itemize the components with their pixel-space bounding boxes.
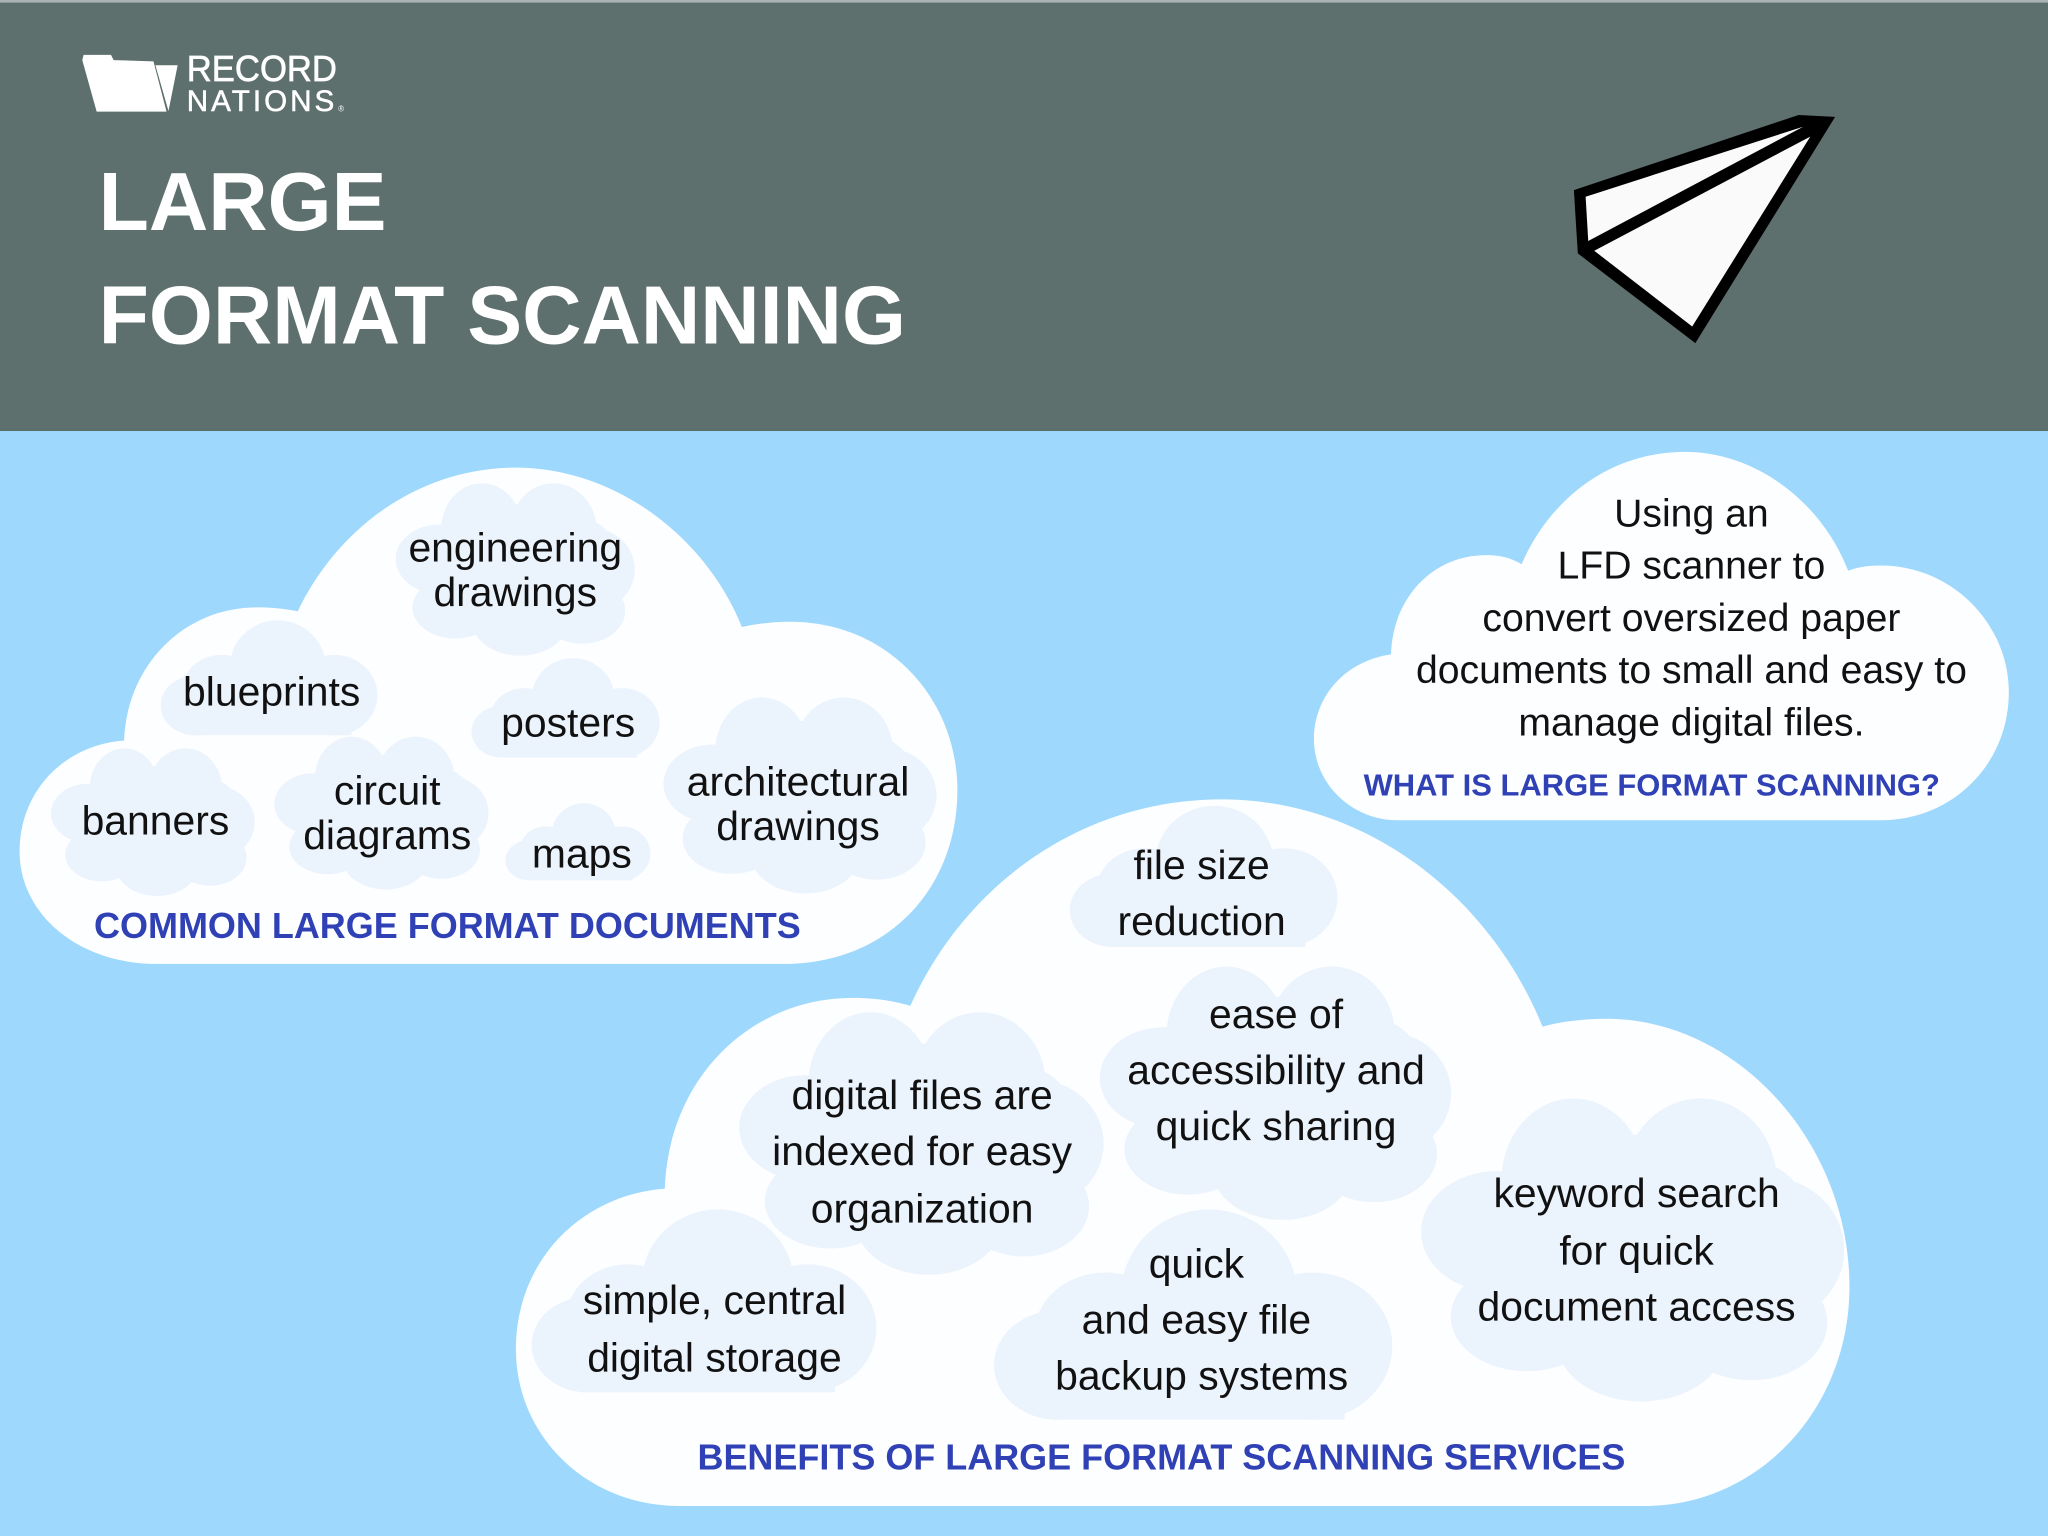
definition text: Using an <box>1614 492 1769 535</box>
heading: benefits: BENEFITS OF LARGE FORMAT SCANNING SERVICES <box>697 1436 1625 1477</box>
item: posters <box>472 658 660 758</box>
item: file size reduction: file size <box>1133 842 1270 888</box>
item: circuit diagrams <box>274 737 488 889</box>
heading: common large format documents: COMMON LARGE FORMAT DOCUMENTS <box>94 905 801 946</box>
cloud shape <box>1314 452 2009 820</box>
icon: paper plane <box>1574 115 1835 343</box>
item: architectural drawings <box>664 697 936 893</box>
logo wordmark: RECORD <box>187 48 337 89</box>
item: architectural drawings: architectural <box>687 758 909 804</box>
item: circuit diagrams: diagrams <box>303 812 471 858</box>
item: simple central storage: simple, central <box>583 1277 846 1323</box>
panel: common large format documents <box>20 468 957 964</box>
item: circuit diagrams: circuit <box>334 768 441 814</box>
item: posters: posters <box>501 700 635 746</box>
item: quick file backup: backup systems <box>1055 1353 1348 1399</box>
item: simple central storage: digital storage <box>587 1334 842 1380</box>
item: digital files indexed <box>739 1012 1104 1275</box>
item: quick file backup: and easy file <box>1082 1297 1311 1343</box>
item: digital files indexed: digital files are <box>791 1072 1053 1118</box>
item: engineering drawings: drawings <box>433 569 597 615</box>
panel: what is large format scanning <box>1314 452 2009 820</box>
header band <box>0 0 2048 431</box>
logo wordmark: ® <box>338 105 344 114</box>
definition text: convert oversized paper <box>1482 597 1900 640</box>
item: engineering drawings: engineering <box>408 525 622 571</box>
item: blueprints: blueprints <box>183 668 360 714</box>
title: FORMAT SCANNING <box>99 271 906 362</box>
item: file size reduction <box>1070 806 1337 947</box>
item: ease of accessibility <box>1100 967 1451 1220</box>
item: quick file backup: quick <box>1149 1240 1245 1286</box>
definition text: documents to small and easy to <box>1416 649 1967 692</box>
item: quick file backup <box>994 1209 1392 1420</box>
item: maps: maps <box>532 830 632 876</box>
definition text: LFD scanner to <box>1558 545 1825 588</box>
item: keyword search: for quick <box>1559 1227 1714 1273</box>
item: engineering drawings <box>396 483 635 656</box>
logo wordmark <box>187 48 344 118</box>
item: ease of accessibility: accessibility and <box>1127 1047 1425 1093</box>
definition text <box>1416 492 1967 744</box>
item: maps <box>505 803 650 880</box>
cloud shape <box>20 468 957 964</box>
logo: Record Nations <box>82 48 344 118</box>
title: LARGE <box>99 157 387 248</box>
logo wordmark: NATIONS <box>187 85 337 118</box>
icon: folder <box>82 55 178 112</box>
cloud shape <box>516 799 1849 1506</box>
item: ease of accessibility: ease of <box>1209 991 1344 1037</box>
item: keyword search <box>1421 1098 1844 1401</box>
item: banners: banners <box>82 798 229 844</box>
heading: what is large format scanning: WHAT IS LARGE FORMAT SCANNING? <box>1364 767 1940 802</box>
item: digital files indexed: organization <box>811 1186 1033 1232</box>
definition text: manage digital files. <box>1518 701 1865 744</box>
title <box>99 157 906 362</box>
item: file size reduction: reduction <box>1118 898 1286 944</box>
item: keyword search: keyword search <box>1493 1170 1780 1216</box>
item: banners <box>51 748 255 896</box>
item: ease of accessibility: quick sharing <box>1156 1103 1397 1149</box>
item: keyword search: document access <box>1478 1283 1796 1329</box>
item: simple central storage <box>532 1209 876 1392</box>
item: architectural drawings: drawings <box>716 803 880 849</box>
panel: benefits of large format scanning services <box>516 799 1849 1506</box>
item: blueprints <box>161 620 377 735</box>
item: digital files indexed: indexed for easy <box>772 1128 1073 1174</box>
